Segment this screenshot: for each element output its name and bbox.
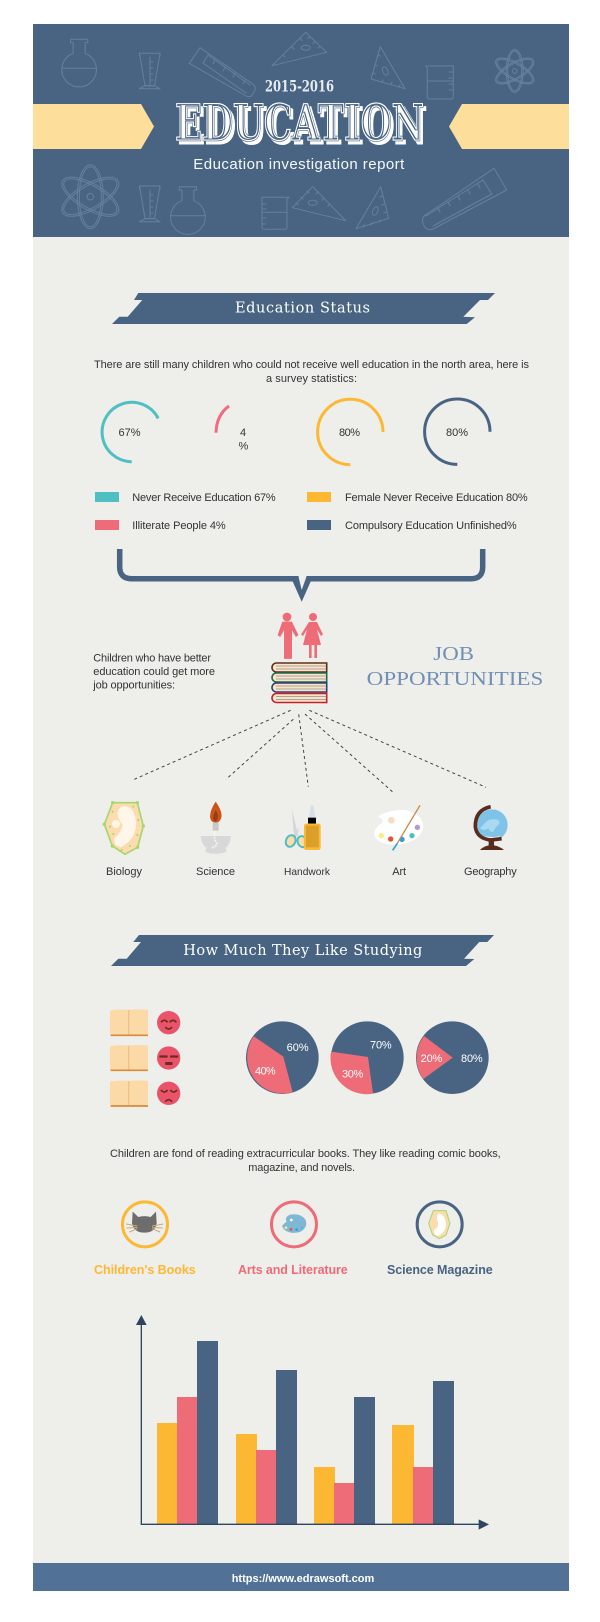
ring chart: 80% unfinished: 80% xyxy=(446,427,468,439)
subject labels: Art xyxy=(392,866,406,878)
ring chart: 4% xyxy=(216,406,248,452)
icon: atom top xyxy=(492,50,538,92)
ring chart: 67%: 67% xyxy=(118,427,141,439)
ribbon: right xyxy=(449,104,569,149)
icon: book 2 xyxy=(110,1045,148,1070)
ring chart: 4%: % xyxy=(238,440,248,452)
icon: boy xyxy=(278,613,298,658)
bar chart xyxy=(136,1315,489,1530)
text block: survey intro xyxy=(94,359,530,385)
ring chart: 67% xyxy=(102,402,158,462)
ring chart: 80% unfinished xyxy=(425,399,490,464)
bracket callout xyxy=(120,549,483,602)
pie chart: 60/40: 40% xyxy=(255,1065,276,1077)
icon: test tube top xyxy=(189,48,255,97)
subject icons xyxy=(103,801,508,854)
text block: better education xyxy=(92,652,215,692)
icon: test tube bottom xyxy=(422,168,507,230)
text block: better education: education could get more xyxy=(93,666,215,678)
title: EDUCATION xyxy=(175,93,424,152)
reading categories xyxy=(122,1202,462,1247)
subject labels: Science xyxy=(196,866,235,878)
pie chart: 70/30 xyxy=(330,1021,404,1094)
pie chart: 60/40: 60% xyxy=(287,1042,309,1054)
legend: Never Receive Education 67% xyxy=(132,492,276,504)
footer: https://www.edrawsoft.com xyxy=(232,1573,375,1585)
bars: group 2 xyxy=(236,1370,297,1524)
icon: flask bottom xyxy=(171,187,205,234)
icon: palette circle xyxy=(271,1202,316,1247)
icon: set square bottom left xyxy=(292,187,346,221)
title: EDUCATION xyxy=(178,96,427,156)
legend: Illiterate People 4% xyxy=(132,520,226,532)
footer xyxy=(33,1563,569,1591)
text block: reading: magazine, and novels. xyxy=(248,1162,355,1174)
icon: stack of books xyxy=(272,663,327,702)
legend xyxy=(95,492,528,532)
pie chart: 60/40 xyxy=(246,1021,319,1094)
text block: survey intro: There are still many children who could not receive well education in the north area, here is xyxy=(94,359,530,371)
title: EDUCATION xyxy=(175,93,424,152)
banner: How Much They Like Studying xyxy=(111,935,494,966)
ribbon: left xyxy=(33,104,154,149)
category labels: Children's Books xyxy=(94,1263,196,1277)
chart axes xyxy=(136,1315,489,1530)
text block: survey intro: a survey statistics: xyxy=(266,373,357,385)
icon: set square right xyxy=(371,47,405,89)
text: years: 2015-2016 xyxy=(265,76,334,96)
bars: group 4 xyxy=(392,1381,454,1524)
heading: job opportunities: OPPORTUNITIES xyxy=(367,668,543,690)
category labels xyxy=(94,1263,493,1277)
ring chart: 4%: 4 xyxy=(240,427,246,439)
pie chart: 80/20: 80% xyxy=(461,1053,483,1065)
icon: scissors and glue xyxy=(284,805,321,850)
pie chart: 80/20 xyxy=(416,1021,489,1094)
title: EDUCATION xyxy=(175,93,424,152)
subject labels: Geography xyxy=(464,866,517,878)
pie chart: 70/30: 30% xyxy=(342,1068,364,1080)
icon: globe xyxy=(475,807,508,850)
icon: neutral face xyxy=(157,1046,180,1070)
liking studies xyxy=(110,1009,489,1106)
legend: Compulsory Education Unfinished% xyxy=(345,520,517,532)
icon: book 3 xyxy=(110,1080,148,1106)
icon: measuring cup bottom xyxy=(139,186,160,222)
text block: reading: Children are fond of reading extracurricular books. They like reading comic books, xyxy=(110,1148,501,1160)
bars: group 1 xyxy=(157,1341,218,1524)
icon: cat circle xyxy=(122,1202,167,1247)
subtitle: Education investigation report xyxy=(193,156,405,173)
pie chart: 80/20: 20% xyxy=(421,1053,443,1065)
heading: job opportunities: JOB xyxy=(433,643,474,665)
icon: beaker top xyxy=(426,66,453,99)
icon: set square bottom right xyxy=(356,187,389,229)
bars: group 3 xyxy=(314,1397,375,1524)
pie chart: 70/30: 70% xyxy=(370,1039,392,1051)
icon: flask top xyxy=(62,39,97,87)
icon: sad face xyxy=(157,1082,180,1105)
legend: Female Never Receive Education 80% xyxy=(345,492,528,504)
title xyxy=(175,93,427,156)
icon: burner xyxy=(201,802,231,854)
subject labels: Handwork xyxy=(284,867,331,878)
icon: biology cell xyxy=(103,801,145,854)
category labels: Arts and Literature xyxy=(238,1263,348,1277)
icon: palette xyxy=(374,805,423,850)
category labels: Science Magazine xyxy=(387,1263,493,1277)
icon: happy face xyxy=(157,1011,180,1034)
banner: Education Status xyxy=(112,293,495,324)
ring chart: 80%: 80% xyxy=(339,427,360,439)
text block: reading xyxy=(110,1148,501,1174)
subject labels: Biology xyxy=(106,866,142,878)
subject labels xyxy=(106,866,517,878)
icon: cell circle xyxy=(417,1202,462,1247)
icon: beaker bottom xyxy=(262,197,289,229)
banner: Education Status: Education Status xyxy=(235,300,370,316)
text block: better education: Children who have better xyxy=(93,652,211,664)
panel: header xyxy=(33,24,569,237)
icon: measuring cup top xyxy=(139,53,160,89)
dashed connectors xyxy=(134,710,486,792)
icon: book 1 xyxy=(110,1009,148,1035)
icon: atom bottom xyxy=(56,165,125,229)
icon: set square top xyxy=(272,32,327,66)
text block: better education: job opportunities: xyxy=(92,680,175,692)
icon: girl xyxy=(301,613,323,658)
banner: How Much They Like Studying: How Much They Like Studying xyxy=(183,943,422,959)
title: EDUCATION xyxy=(175,93,424,152)
heading: job opportunities xyxy=(367,643,543,690)
ring chart: 80% xyxy=(318,399,383,465)
